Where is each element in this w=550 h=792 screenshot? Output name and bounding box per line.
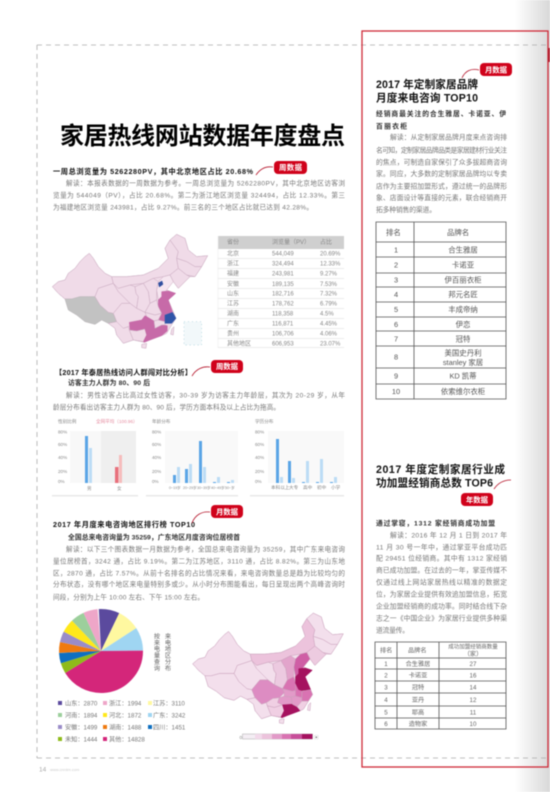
text block: brand commentary: 拓多种销售的渠道。: [376, 205, 436, 214]
table: dealer ranking: 5: [384, 710, 388, 716]
chart: education distribution: 大专: [289, 484, 299, 491]
heading: dealer TOP6: [376, 463, 505, 490]
text block: monthly commentary: 量位居榜首，3242 通，占比 9.19%。第二为江苏地区，3110 通，占比 8.82%。第三为山东地: [53, 556, 345, 566]
section: monthly region ranking: [53, 505, 345, 602]
tag: yearly data: [461, 493, 493, 506]
table: visits by province: 23.07%: [320, 342, 341, 348]
text block: monthly commentary: [53, 544, 345, 602]
chart: gender ratio: 80%: [58, 430, 67, 434]
map: visits by province: [52, 234, 208, 348]
chart: education distribution: 20%: [255, 469, 264, 474]
chart: age distribution: 20~29岁: [183, 485, 197, 490]
table: dealer ranking: [375, 642, 506, 729]
pie chart legend: 其他：14828: [109, 736, 145, 744]
tag: weekly data: [211, 360, 243, 373]
subheading: brand: 百丽衣柜: [376, 122, 407, 130]
table: visits by province: 324,494: [272, 262, 294, 268]
text block: brand commentary: 名可知，定制家居品牌品类是家居建材行业关注: [376, 146, 507, 154]
table: brand ranking: 5: [394, 305, 398, 314]
table: dealer ranking: 品牌名: [408, 646, 427, 654]
table: dealer ranking: 卡诺亚: [409, 672, 427, 680]
table: visits by province: 243,981: [272, 272, 294, 278]
subheading: dealer: 通过掌寝，1312 家经销商成功加盟: [376, 518, 495, 528]
pie chart legend: [58, 700, 186, 744]
table: dealer ranking: 27: [470, 661, 477, 668]
map legend: colour scale: [240, 734, 319, 740]
text block: dealer commentary: 仅通过线上网站家居热线以精准的数据定: [376, 578, 507, 586]
table: brand ranking: 依索维尔衣柜: [441, 387, 486, 396]
subheading: brand: [376, 109, 506, 130]
chart: education distribution: 学历分布: [255, 418, 274, 425]
table: dealer ranking: 合生雅居: [406, 660, 430, 668]
arrow: weekly tag: [256, 167, 273, 175]
chart: age distribution: 0%: [152, 479, 159, 484]
chart: age distribution: [146, 418, 238, 496]
table: visits by province: 广东: [227, 320, 239, 328]
page number: [39, 766, 80, 774]
text block: monthly commentary: 区，2870 通，占比 7.57%。从前十名排名的占比情况来看，来电咨询数量总是趋为比较均匀的: [53, 568, 345, 578]
table: visits by province: 20.69%: [320, 252, 341, 258]
pie chart legend: 浙江：1994: [109, 700, 142, 708]
chart: gender ratio: 性别比例: [58, 418, 77, 425]
table: visits by province: 7.53%: [320, 282, 338, 288]
text block: dealer commentary: 道流量传。: [376, 626, 409, 634]
text block: weekly commentary: 览量为 544049（PV），占比 20.68%。第二为浙江地区浏览量 324494，占比 12.33%。第三: [53, 190, 345, 200]
table: brand ranking: 9: [394, 372, 398, 380]
table: brand ranking: 伊百丽衣柜: [445, 276, 482, 284]
pie chart legend: 湖南：1488: [109, 724, 142, 732]
chart: education distribution: 本科以上: [271, 484, 290, 491]
tag: yearly data: 年数据: [466, 496, 489, 504]
table: visits by province: 189,135: [272, 282, 294, 288]
map legend: colour scale: 0: [240, 735, 242, 740]
table: visits by province: 6.79%: [320, 302, 338, 308]
table: dealer ranking: 亚丹: [412, 697, 424, 704]
table: visits by province: 116,871: [272, 322, 294, 328]
heading: brand TOP10: 月度来电咨询 TOP10: [376, 92, 478, 104]
table: brand ranking: 6: [394, 320, 398, 329]
text block: brand commentary: 的焦点，可制造自家保引了众多拔超商咨询: [376, 158, 507, 166]
tag: monthly data: 月数据: [485, 66, 508, 74]
chart: gender ratio: 20%: [58, 469, 67, 474]
chart: age distribution: 60%: [152, 442, 161, 447]
table: visits by province: 浏览量（PV）: [272, 238, 310, 246]
table: visits by province: 544,049: [272, 252, 294, 258]
text block: brand commentary: [376, 132, 507, 214]
table: dealer ranking: 1: [384, 661, 388, 668]
chart: gender ratio: 全网平均（100.96）: [96, 418, 138, 425]
text block: weekly commentary: 为福建地区浏览量 243981，占比 9.27%。前三名的三个地区占比就已达到 42.28%。: [53, 202, 313, 212]
text block: brand commentary: 象、店面设计等直接的元素，联合经销商开: [376, 193, 507, 202]
chart: age distribution: 0~19岁: [169, 485, 181, 490]
chart: age distribution: 年龄分布: [152, 418, 171, 425]
chart: gender ratio: 60%: [58, 442, 67, 447]
table: dealer ranking: 3: [384, 684, 388, 692]
table: dealer ranking: 耶高: [412, 708, 424, 716]
table: visits by province: 其他地区: [227, 340, 251, 348]
page number: 14: [39, 766, 47, 774]
table: dealer ranking: 冠特: [412, 684, 424, 692]
table: visits by province: 北京: [227, 250, 239, 258]
pie chart legend: 四川：1451: [153, 724, 186, 732]
table: dealer ranking: 2: [384, 672, 388, 680]
table: brand ranking: 卡诺亚: [452, 260, 475, 270]
arrow: monthly tag: [192, 512, 210, 523]
table: visits by province: 12.33%: [320, 262, 341, 268]
table: visits by province: [218, 236, 344, 348]
table: brand ranking: 伊恋: [456, 320, 470, 329]
pie chart title: 来电地区分布: [164, 633, 171, 672]
map legend: colour scale: ▣: [314, 735, 319, 740]
chart: age distribution: 40%: [152, 455, 161, 460]
table: visits by province: 贵州: [227, 330, 239, 338]
chart: age distribution: 80%: [152, 430, 161, 434]
table: dealer ranking: 11: [470, 710, 477, 716]
heading: audience analysis: 【2017 年泰居热线访问人群闯对比分析】: [55, 368, 192, 377]
chart: gender ratio: 0%: [58, 479, 65, 484]
table: brand ranking: 7: [394, 334, 398, 344]
table: visits by province: 9.27%: [320, 272, 338, 278]
table: visits by province: 118,358: [272, 312, 294, 318]
pie chart: calls by region: [79, 629, 123, 673]
arrow: dealer tag: [494, 480, 511, 489]
tag: weekly data: [274, 161, 307, 174]
table: dealer ranking: 成功加盟经销商数量: [448, 642, 498, 650]
chart: gender ratio: 40%: [58, 455, 67, 460]
chart: education distribution: 初中: [317, 484, 327, 491]
table: brand ranking: 丰成帝纳: [448, 305, 478, 314]
text block: audience commentary: 龄层分布看出访客主力人群为 80、90 后，学历方面本科及以上占比为拖高。: [53, 402, 280, 412]
title: 家居热线网站数据年度盘点: [60, 123, 345, 150]
chart: education distribution: 小学: [331, 484, 341, 491]
table: visits by province: 606,953: [272, 342, 294, 348]
chart: gender ratio: [52, 416, 138, 496]
table: brand ranking: KD 凯蒂: [449, 372, 477, 380]
table: brand ranking: 4: [394, 290, 398, 299]
chart: education distribution: 40%: [255, 455, 264, 460]
arrow: audience tag: [192, 367, 210, 376]
text block: audience commentary: 解读：男性访客占比高过女性访客，30-39 岁为访客主力年龄层，其次为 20-29 岁，从年: [66, 390, 345, 400]
pie chart title: 按来电量查询: [152, 632, 160, 672]
heading: weekly overview: 一周总浏览量为 5262280PV，其中北京地区占比 20.68%: [53, 167, 254, 176]
table: visits by province: 7.32%: [320, 292, 338, 298]
text block: dealer commentary: [376, 530, 507, 634]
table: dealer ranking: 4: [384, 697, 388, 704]
table: brand ranking: 合生雅居: [448, 246, 478, 254]
table: visits by province: 福建: [227, 270, 239, 278]
table: brand ranking: 10: [392, 387, 400, 396]
table: brand ranking: 1: [394, 246, 398, 254]
chart: gender ratio: 女: [117, 485, 122, 492]
table: visits by province: 省份: [227, 238, 239, 246]
chart: education distribution: 0%: [255, 479, 262, 484]
table: visits by province: 178,762: [272, 302, 294, 308]
chart: age distribution: 50~岁: [225, 485, 235, 490]
table: brand ranking: 排名: [386, 228, 401, 237]
table: visits by province: 浙江: [227, 260, 239, 268]
chart: education distribution: 80%: [255, 430, 264, 434]
subheading: monthly ranking: 全国总来电咨询量为 35259，广东地区月度咨询位居榜首: [68, 532, 240, 542]
table: dealer ranking: （家）: [464, 650, 482, 658]
arrow: brand tag: [462, 69, 479, 78]
table: brand ranking: stanley 家居: [443, 358, 483, 367]
pie chart legend: 广东：3242: [153, 712, 186, 720]
heading: brand TOP10: 2017 年定制家居品牌: [376, 78, 478, 91]
table: dealer ranking: 排名: [380, 646, 392, 654]
table: visits by province: 湖南: [227, 310, 239, 318]
text block: dealer commentary: 企业加盟经销商的成功率。同时结合线下杂: [376, 602, 507, 610]
text block: brand commentary: 店作为主要招加盟形式，遵过统一的品牌形: [376, 182, 507, 190]
heading: monthly ranking: 2017 年月度来电咨询地区排行榜 TOP10: [53, 520, 195, 529]
text block: audience commentary: [53, 390, 345, 412]
table: visits by province: 106,706: [272, 332, 294, 338]
table: dealer ranking: 14: [470, 684, 477, 692]
chart: age distribution: 20%: [152, 469, 161, 474]
table: visits by province: 4.5%: [320, 312, 334, 318]
panel: right column: [362, 31, 550, 767]
pie chart legend: 河南：1894: [65, 712, 98, 720]
table: visits by province: 山东: [227, 290, 239, 298]
table: dealer ranking: 10: [470, 721, 477, 728]
chart: education distribution: 60%: [255, 442, 264, 447]
table: brand ranking: 品牌名: [447, 228, 469, 237]
tag: weekly data: 周数据: [279, 163, 303, 172]
table: dealer ranking: 12: [470, 697, 477, 704]
table: brand ranking: [376, 222, 506, 399]
pie chart legend: 未知：1444: [65, 736, 98, 744]
pie chart legend: 河北：1872: [109, 712, 142, 720]
page number: www.cnrdm.com: [50, 767, 80, 772]
text block: monthly commentary: 分布状态，没有哪个地区来电量特别多或少。从小时分布图能看出，每日呈现出两个高峰咨询时: [53, 580, 345, 588]
text block: dealer commentary: 商已成功加盟。在过去的一年，掌亚传媒不: [376, 566, 507, 574]
table: brand ranking: 2: [394, 260, 398, 270]
table: visits by province: 4.06%: [320, 332, 338, 338]
text block: dealer commentary: 志之一《中国企业》为家居行业提供多种渠: [376, 614, 507, 622]
section: weekly overview: [53, 161, 345, 212]
table: dealer ranking: 16: [470, 672, 477, 680]
text block: weekly commentary: 解读：本报表数据的一周数据为参考。一周总浏览量为 5262280PV，其中北京地区访客浏: [66, 178, 345, 188]
table: visits by province: 占比: [320, 238, 332, 246]
subheading: audience: 访客主力人群为 80、90 后: [68, 378, 150, 387]
tag: monthly data: [211, 505, 243, 518]
tag: monthly data: [480, 63, 512, 76]
text block: brand commentary: 解读：从定制家居品牌月度来点咨询排: [390, 132, 507, 142]
chart: gender ratio: 男: [87, 486, 92, 492]
text block: monthly commentary: 解读：以下三个图表数据一月数据为参考，全国总来电咨询量为 35259，其中广东来电咨询: [66, 544, 345, 554]
heading: dealer TOP6: 功加盟经销商总数 TOP6: [376, 476, 493, 490]
heading: dealer TOP6: 2017 年度定制家居行业成: [376, 463, 505, 476]
pie chart legend: 江苏：3110: [153, 700, 185, 708]
table: visits by province: 182,716: [272, 292, 294, 298]
pie chart legend: 安徽：1499: [65, 724, 98, 732]
table: dealer ranking: 6: [384, 721, 388, 728]
chart: age distribution: 30~39岁: [197, 485, 211, 490]
table: visits by province: 4.45%: [320, 322, 338, 328]
table: brand ranking: 美国史丹利: [445, 348, 481, 358]
table: brand ranking: 8: [394, 352, 398, 362]
chart: education distribution: [250, 418, 344, 496]
table: dealer ranking: 造物家: [409, 720, 427, 728]
tag: weekly data: 周数据: [216, 362, 239, 371]
table: visits by province: 安徽: [227, 280, 239, 288]
table: visits by province: 江苏: [227, 300, 239, 308]
text block: dealer commentary: 解读：2016 年 12 月 1 日到 2017 年: [390, 530, 507, 540]
heading: brand TOP10: [376, 78, 478, 104]
table: brand ranking: 邦元名匠: [448, 290, 478, 299]
text block: dealer commentary: 位，为家居企业提供有效追加盟信息，拓宽: [376, 590, 507, 598]
chart: education distribution: 高中: [303, 484, 313, 491]
table: brand ranking: 冠特: [456, 334, 471, 344]
table: brand ranking: 3: [394, 276, 398, 284]
text block: weekly commentary: [53, 178, 345, 212]
section: audience analysis: [53, 360, 345, 412]
text block: monthly commentary: 间段，分别为上午 10:00 左右、下午 15:00 左右。: [53, 592, 204, 602]
text block: dealer commentary: 配 29451 位经销商。其中有 1312 家经销: [376, 554, 507, 562]
tag: monthly data: 月数据: [216, 508, 239, 516]
chart: age distribution: 40~49岁: [211, 485, 225, 490]
pie chart title: [152, 632, 171, 672]
text block: dealer commentary: 11 月 30 号一年中，通过掌亚平台成功匹: [376, 542, 507, 552]
text block: brand commentary: 家。同应，大多数的定制家居品牌均以专卖: [376, 169, 507, 178]
pie chart legend: 山东：2870: [65, 700, 98, 708]
subheading: brand: 经销商最关注的合生雅居、卡诺亚、伊: [376, 109, 506, 118]
map: calls by province: [193, 613, 343, 724]
